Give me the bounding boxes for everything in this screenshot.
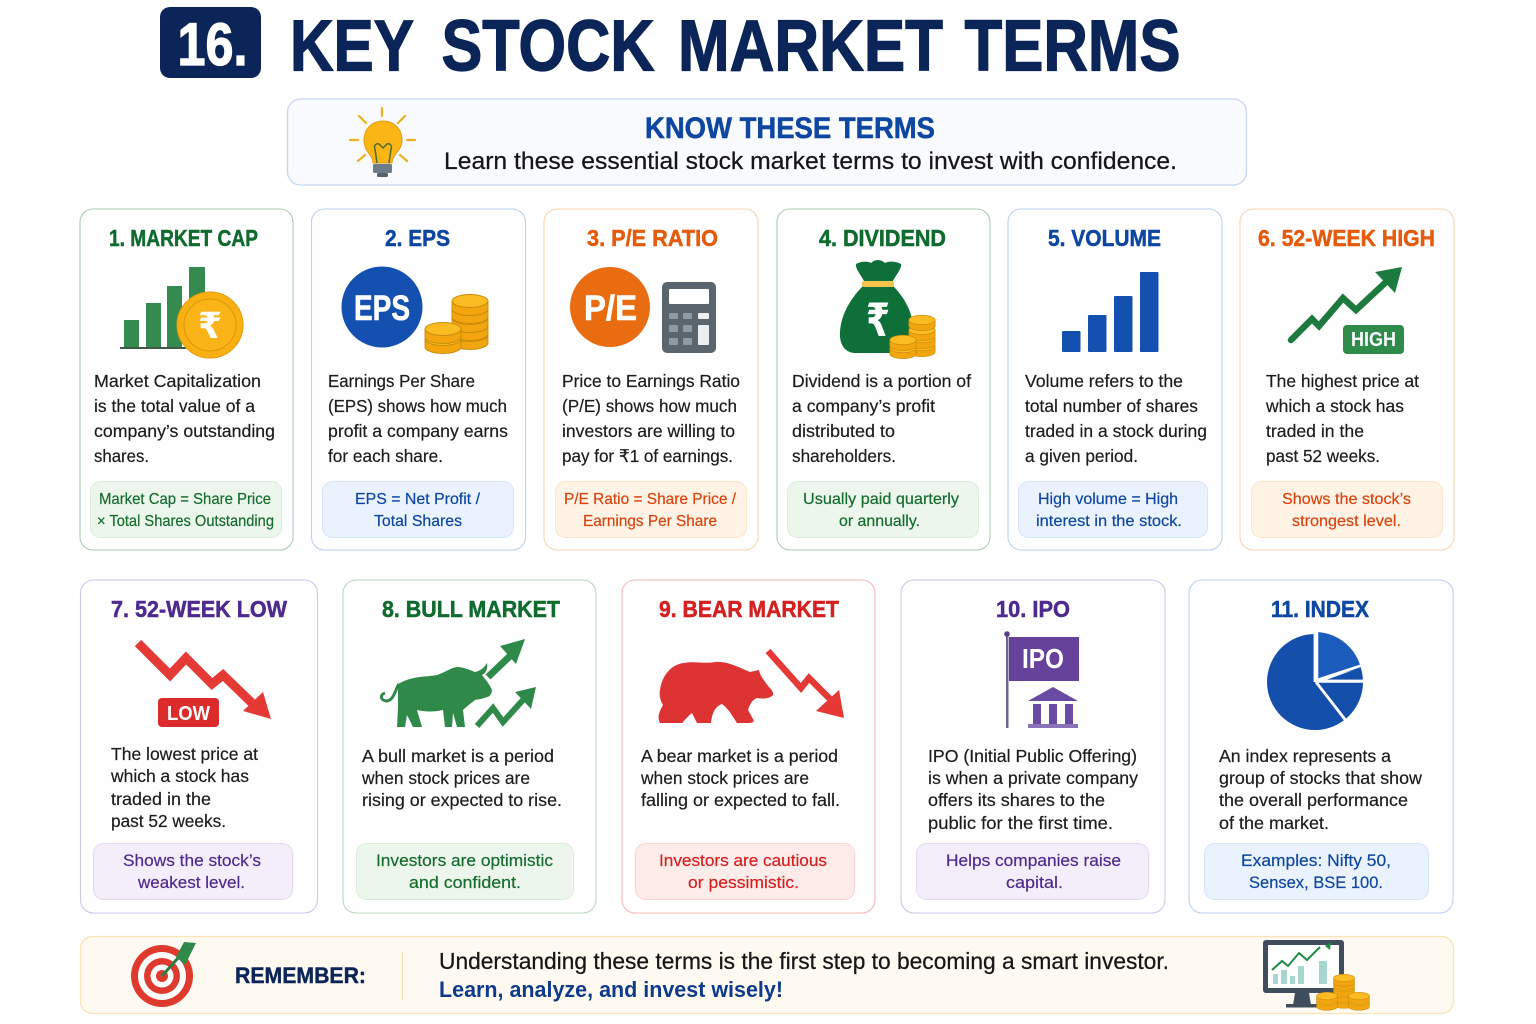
note box	[94, 844, 292, 900]
note box: Investors are optimistic	[376, 851, 554, 870]
note box: Examples: Nifty 50,	[1241, 851, 1391, 870]
icon: eps circle with coins: EPS	[354, 289, 410, 328]
icon: bars with rupee coin	[120, 267, 243, 358]
note box: Usually paid quarterly	[803, 491, 959, 508]
title text: TERMS	[964, 6, 1180, 86]
panel: dividend	[777, 209, 990, 550]
description: traded in a stock during	[1025, 421, 1207, 441]
icon: bear with falling arrow	[659, 651, 844, 723]
formula box: Earnings Per Share	[583, 513, 717, 530]
note box: strongest level.	[1292, 513, 1401, 530]
heading: 10. IPO	[996, 596, 1070, 622]
description	[1025, 371, 1207, 466]
description	[361, 746, 562, 810]
message: Understanding these terms is the first step to becoming a smart investor.	[439, 948, 1169, 974]
heading: 1. MARKET CAP	[109, 225, 258, 251]
heading: 11. INDEX	[1271, 596, 1369, 622]
heading: 2. EPS	[385, 225, 450, 251]
description: group of stocks that show	[1219, 768, 1422, 788]
banner subtitle: Learn these essential stock market terms to invest with confidence.	[444, 148, 1177, 175]
heading: 6. 52-WEEK HIGH	[1258, 225, 1435, 251]
description: company’s outstanding	[94, 421, 275, 441]
description: falling or expected to fall.	[641, 790, 840, 810]
note box: Helps companies raise	[946, 851, 1121, 870]
heading: 9. BEAR MARKET	[659, 596, 840, 622]
panel: 52-week low	[80, 580, 318, 913]
note box	[788, 482, 978, 538]
heading: 3. P/E RATIO	[587, 225, 718, 251]
description	[94, 371, 275, 466]
icon: ipo flag and bank	[1004, 631, 1079, 728]
icon: rising arrow with high badge: HIGH	[1351, 329, 1396, 351]
description: IPO (Initial Public Offering)	[928, 746, 1137, 766]
description: a company’s profit	[792, 396, 935, 416]
description: A bull market is a period	[362, 746, 554, 766]
formula box: Total Shares	[374, 513, 462, 530]
description: (EPS) shows how much	[328, 396, 507, 416]
description: is the total value of a	[94, 396, 255, 416]
note box: capital.	[1006, 873, 1063, 892]
description	[640, 746, 840, 810]
icon: light bulb	[350, 108, 415, 177]
icon: eps circle with coins	[342, 266, 488, 354]
description: of the market.	[1219, 813, 1329, 833]
icon: rising arrow with high badge	[1291, 267, 1404, 354]
description: when stock prices are	[640, 768, 809, 788]
description: offers its shares to the	[928, 790, 1105, 810]
description: past 52 weeks.	[111, 811, 226, 831]
description	[110, 744, 258, 831]
formula box	[90, 482, 282, 538]
note box: Sensex, BSE 100.	[1249, 873, 1383, 892]
panel: bull market	[343, 580, 596, 913]
note box: interest in the stock.	[1036, 513, 1182, 530]
note box	[356, 844, 574, 900]
panel: index	[1189, 580, 1453, 913]
formula box: EPS = Net Profit /	[355, 491, 481, 508]
formula box: P/E Ratio = Share Price /	[564, 491, 737, 508]
heading: 4. DIVIDEND	[819, 225, 946, 251]
icon: pie chart	[1267, 632, 1366, 730]
description: (P/E) shows how much	[562, 396, 737, 416]
description: Volume refers to the	[1025, 371, 1183, 391]
message: Learn, analyze, and invest wisely!	[439, 977, 783, 1002]
description: An index represents a	[1219, 746, 1391, 766]
banner: know these terms	[288, 99, 1246, 185]
description: Price to Earnings Ratio	[562, 371, 740, 391]
description: is when a private company	[928, 768, 1138, 788]
note box: and confident.	[409, 873, 521, 892]
formula box	[556, 482, 746, 538]
note box	[1252, 482, 1442, 538]
heading: 5. VOLUME	[1048, 225, 1161, 251]
description: Market Capitalization	[94, 371, 261, 391]
title text	[290, 6, 1180, 86]
icon: ipo flag and bank: IPO	[1022, 643, 1064, 674]
description	[928, 746, 1138, 833]
description: shares.	[94, 446, 149, 466]
description: investors are willing to	[562, 421, 735, 441]
panel: bear market	[622, 580, 875, 913]
description: distributed to	[792, 421, 895, 441]
icon: bull with rising arrows	[381, 639, 536, 727]
description: The lowest price at	[111, 744, 258, 764]
note box: or pessimistic.	[688, 873, 799, 892]
label: REMEMBER:	[235, 963, 366, 988]
description: traded in the	[1266, 421, 1364, 441]
description: for each share.	[328, 446, 443, 466]
description: a given period.	[1025, 446, 1138, 466]
formula box: × Total Shares Outstanding	[97, 513, 274, 530]
message	[439, 948, 1169, 1002]
description: public for the first time.	[928, 813, 1113, 833]
icon: bars with rupee coin: ₹	[198, 305, 222, 346]
icon: monitor with coins	[1263, 940, 1369, 1010]
icon: volume bars	[1062, 272, 1158, 352]
title	[160, 6, 1180, 86]
panel: market cap	[80, 209, 293, 550]
description	[1265, 371, 1419, 466]
description: rising or expected to rise.	[362, 790, 562, 810]
note box: Shows the stock’s	[123, 851, 261, 870]
description: Earnings Per Share	[328, 371, 475, 391]
note box: High volume = High	[1038, 491, 1178, 508]
description	[328, 371, 508, 466]
description: when stock prices are	[361, 768, 530, 788]
heading: 8. BULL MARKET	[382, 596, 561, 622]
description: shareholders.	[792, 446, 896, 466]
note box	[916, 844, 1148, 900]
description: pay for ₹1 of earnings.	[562, 446, 733, 466]
note box: Investors are cautious	[659, 851, 827, 870]
panel: p/e ratio	[544, 209, 758, 550]
description	[792, 371, 971, 466]
panel: ipo	[901, 580, 1165, 913]
icon: falling arrow with low badge: LOW	[167, 703, 210, 725]
panel: 52-week high	[1240, 209, 1454, 550]
icon: falling arrow with low badge	[138, 643, 271, 727]
note box	[636, 844, 854, 900]
description: profit a company earns	[328, 421, 508, 441]
icon: p/e circle with calculator: P/E	[584, 289, 637, 328]
note box: weakest level.	[137, 873, 245, 892]
description: past 52 weeks.	[1266, 446, 1380, 466]
description: total number of shares	[1025, 396, 1198, 416]
panel: eps	[312, 209, 526, 550]
description	[1219, 746, 1422, 833]
note box	[1204, 844, 1428, 900]
description: which a stock has	[1265, 396, 1404, 416]
title text: MARKET	[678, 6, 943, 86]
formula box: Market Cap = Share Price	[99, 491, 271, 508]
description	[562, 371, 740, 466]
description: the overall performance	[1219, 790, 1408, 810]
callout: remember	[80, 936, 1454, 1014]
heading: 7. 52-WEEK LOW	[111, 596, 288, 622]
note box: or annually.	[839, 513, 920, 530]
icon: money bag with coins: ₹	[866, 294, 890, 346]
note box	[1018, 482, 1208, 538]
banner heading: KNOW THESE TERMS	[645, 112, 935, 145]
title text: KEY	[290, 6, 414, 86]
description: The highest price at	[1266, 371, 1419, 391]
description: A bear market is a period	[641, 746, 838, 766]
number badge: 16.	[178, 11, 248, 78]
icon: money bag with coins	[840, 260, 935, 359]
panel: volume	[1008, 209, 1222, 550]
icon: target with dart	[131, 942, 196, 1007]
icon: p/e circle with calculator	[570, 267, 716, 353]
formula box	[322, 482, 514, 538]
description: Dividend is a portion of	[792, 371, 971, 391]
title text: STOCK	[442, 6, 654, 86]
description: which a stock has	[110, 766, 249, 786]
description: traded in the	[111, 789, 211, 809]
note box: Shows the stock’s	[1282, 491, 1411, 508]
